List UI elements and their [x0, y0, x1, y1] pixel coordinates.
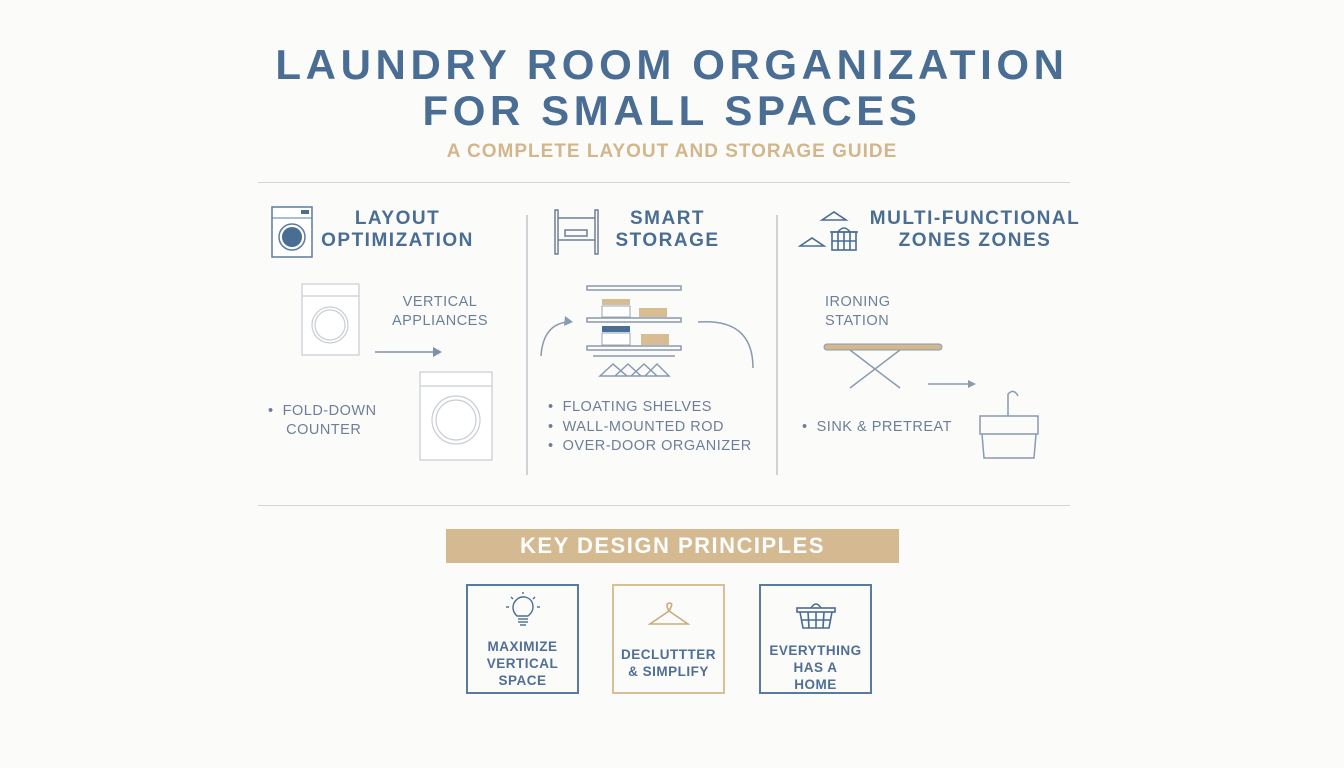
card: everything has a home: EVERYTHING: [769, 643, 862, 658]
text: vertical appliances: APPLIANCES: [392, 313, 488, 329]
card: everything has a home: HAS A: [793, 660, 838, 675]
subtitle: A COMPLETE LAYOUT AND STORAGE GUIDE: [447, 141, 897, 162]
icon: hanger: [648, 602, 690, 625]
heading: SMART: [630, 208, 705, 229]
panel: layout optimization: [268, 206, 493, 461]
text: ironing station: [825, 294, 891, 329]
heading: MULTI-FUNCTIONAL: [870, 208, 1080, 229]
card: declutter & simplify: [612, 584, 725, 694]
text: ironing station: IRONING: [825, 294, 891, 310]
panel: multi-functional zones: [798, 208, 1080, 459]
illustration: shelves with hangers: [540, 285, 754, 377]
bullet: fold-down counter: COUNTER: [286, 422, 361, 438]
bullet list: • FLOATING SHELVES: [548, 399, 712, 415]
title: LAUNDRY ROOM ORGANIZATION: [275, 41, 1069, 88]
card: maximize vertical space: VERTICAL: [487, 656, 558, 671]
text: vertical appliances: [392, 294, 488, 329]
bullet list: • OVER-DOOR ORGANIZER: [548, 438, 752, 454]
illustration: ironing board, arrow, sink: [824, 344, 1039, 459]
heading: [615, 208, 720, 251]
heading: LAYOUT: [355, 208, 440, 229]
icon: shelf: [554, 209, 599, 255]
icon: lightbulb: [506, 592, 540, 626]
title: [275, 41, 1069, 134]
icon: basket: [796, 603, 836, 629]
card: maximize vertical space: [466, 584, 579, 694]
card: maximize vertical space: SPACE: [498, 673, 546, 688]
banner: key design principles: [446, 529, 899, 563]
heading: [321, 208, 474, 251]
bullet: fold-down counter: • FOLD-DOWN: [268, 403, 377, 419]
panel: smart storage: [540, 208, 754, 454]
illustration: washers and arrow: [301, 283, 493, 461]
banner: key design principles: KEY DESIGN PRINCIPLES: [520, 533, 825, 558]
title: FOR SMALL SPACES: [422, 87, 922, 134]
card: everything has a home: HOME: [794, 677, 837, 692]
heading: OPTIMIZATION: [321, 230, 474, 251]
bullet: sink & pretreat: • SINK & PRETREAT: [802, 419, 952, 435]
text: ironing station: STATION: [825, 313, 889, 329]
heading: ZONES ZONES: [899, 230, 1051, 251]
bullet list: [548, 399, 752, 454]
bullet: fold-down counter: [268, 403, 377, 438]
card: declutter & simplify: & SIMPLIFY: [628, 664, 709, 679]
card: everything has a home: [759, 584, 872, 694]
icon: washer: [271, 206, 313, 258]
icon: hangers and basket: [798, 211, 858, 251]
heading: [870, 208, 1080, 251]
card: maximize vertical space: MAXIMIZE: [488, 639, 558, 654]
card: declutter & simplify: DECLUTTTER: [621, 647, 716, 662]
text: vertical appliances: VERTICAL: [403, 294, 477, 310]
bullet list: • WALL-MOUNTED ROD: [548, 418, 724, 434]
heading: STORAGE: [615, 230, 720, 251]
